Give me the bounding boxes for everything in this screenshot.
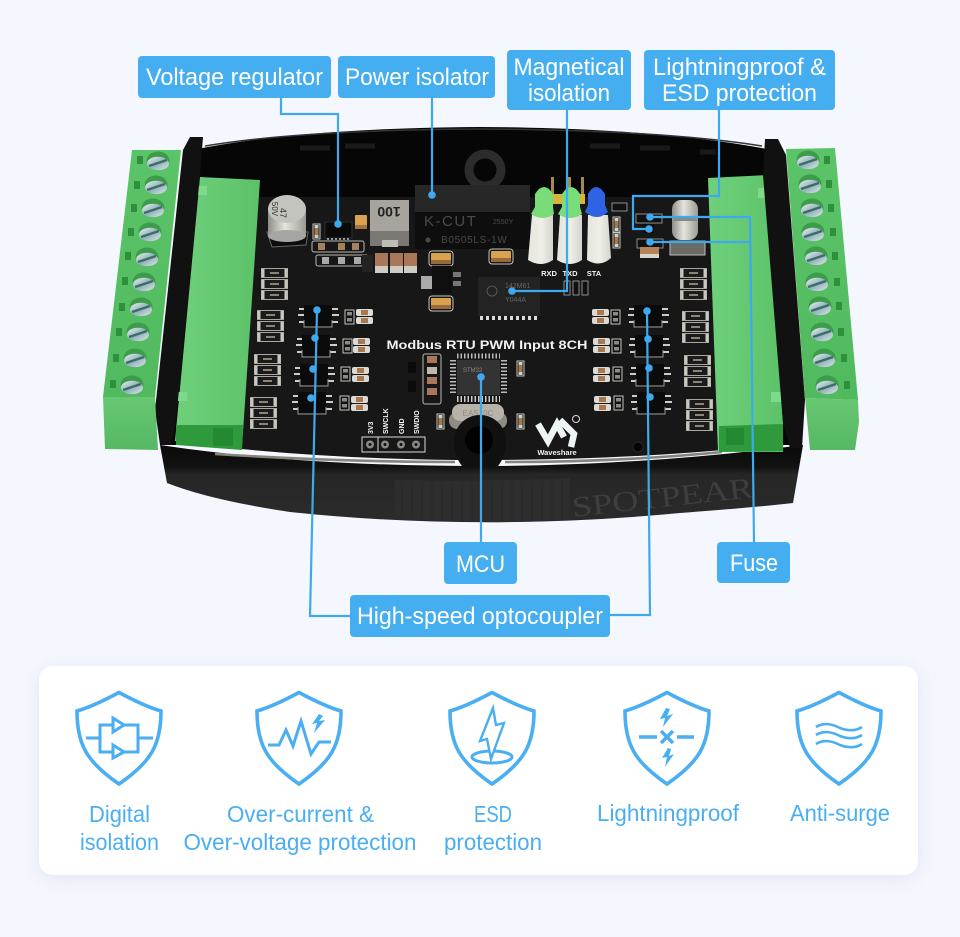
panel background [39, 666, 918, 875]
magnetic isolation chip [478, 277, 540, 318]
crystal oscillator: EAS10C [463, 409, 494, 418]
resistor arrays [250, 268, 713, 431]
debug header: SWDIO [414, 410, 421, 434]
caption [80, 801, 159, 855]
label: Fuse: Fuse [730, 550, 778, 577]
caption: Over-current & [227, 801, 374, 827]
label: Lightningproof and ESD protection: Lightningproof & [653, 54, 826, 81]
tantalum capacitors and regulator [421, 249, 513, 311]
caption: ESD [474, 801, 512, 827]
brand logo [537, 416, 580, 457]
debug header [362, 408, 425, 452]
debug header: GND [399, 418, 406, 434]
caption: Digital [89, 801, 150, 827]
device photo: terminal controller board [103, 127, 859, 524]
callout leader lines [281, 98, 754, 616]
small parts near LEDs [564, 203, 627, 295]
label: Magnetical isolation [507, 50, 631, 110]
electrolytic capacitor: 47 [278, 208, 288, 218]
power isolator module: K-CUT [424, 213, 477, 230]
label: Power isolator [338, 56, 495, 98]
caption: isolation [80, 829, 159, 855]
status LEDs with light pipes [528, 177, 611, 264]
icon: shield with discharge bolt [450, 692, 534, 784]
label: Magnetical isolation: Magnetical [514, 54, 624, 81]
icon: shield with blocked bolts [625, 692, 709, 784]
MCU chip [453, 356, 504, 399]
LED labels: RXD [541, 269, 557, 278]
right outer terminal block [786, 148, 859, 450]
power isolator module: 2550Y [493, 219, 514, 226]
right rubber frame [763, 139, 805, 448]
label: Voltage regulator [138, 56, 331, 98]
magnetic isolation chip: Y044A [505, 297, 526, 304]
debug header: 3V3 [368, 421, 375, 434]
label: High-speed optocoupler: High-speed optocoupler [357, 603, 603, 630]
brand logo: Waveshare [537, 448, 577, 457]
power isolator module: B0505LS-1W [441, 235, 507, 246]
label: Lightningproof and ESD protection [644, 50, 835, 110]
label: MCU [444, 542, 517, 584]
caption: Anti-surge [790, 800, 890, 826]
LED labels [541, 269, 602, 278]
row of chip capacitors [362, 253, 417, 273]
MCU chip: STM32 [463, 368, 483, 374]
label: MCU: MCU [456, 551, 505, 578]
slogan on case: SPOTPEAR [570, 472, 755, 524]
icon: shield with surge waveform [257, 692, 341, 784]
caption [184, 801, 416, 855]
inner right connector [708, 175, 783, 452]
crystal oscillator [449, 404, 507, 429]
electrolytic capacitor [267, 195, 308, 247]
power isolator module [415, 154, 530, 249]
LED labels: TXD [562, 269, 578, 278]
feature: anti-surge [790, 692, 890, 826]
feature: over-current and over-voltage protection [184, 692, 416, 855]
feature: ESD protection [444, 692, 542, 855]
fuse and protection devices [636, 200, 705, 258]
left outer terminal block [103, 150, 181, 450]
label: Power isolator: Power isolator [345, 64, 489, 91]
caption: Over-voltage protection [184, 829, 416, 855]
icon: shield with waves [797, 692, 881, 784]
optocoupler chips [292, 305, 672, 414]
feature: lightningproof [597, 692, 740, 826]
label: Lightningproof and ESD protection: ESD protection [662, 80, 817, 107]
left rubber frame [155, 137, 203, 445]
label: Voltage regulator: Voltage regulator [146, 64, 323, 91]
board title: Modbus RTU PWM Input 8CH [386, 340, 588, 352]
magnetic isolation chip: 142M61 [505, 283, 530, 290]
power inductor: 100 [377, 204, 401, 220]
board bottom edge [215, 452, 722, 462]
caption: protection [444, 829, 542, 855]
LED labels: STA [587, 269, 602, 278]
icon: shield with isolator [77, 692, 161, 784]
voltage regulator chip and passives [312, 215, 368, 266]
caption [444, 801, 542, 855]
capacitors beside MCU [408, 354, 524, 429]
board mounting hole [633, 442, 643, 452]
panel: protection features [39, 666, 918, 875]
device body shell [160, 127, 803, 522]
feature: digital isolation [77, 692, 161, 855]
mounting grommet [454, 415, 506, 466]
debug header: SWCLK [383, 408, 390, 434]
electrolytic capacitor: 50V [270, 202, 279, 217]
label: High-speed optocoupler [350, 595, 610, 637]
inner left connector [175, 177, 260, 450]
printed circuit board [212, 197, 745, 460]
power inductor [370, 200, 409, 247]
label: Fuse [717, 542, 790, 583]
label: Magnetical isolation: isolation [528, 80, 610, 107]
caption: Lightningproof [597, 800, 740, 826]
